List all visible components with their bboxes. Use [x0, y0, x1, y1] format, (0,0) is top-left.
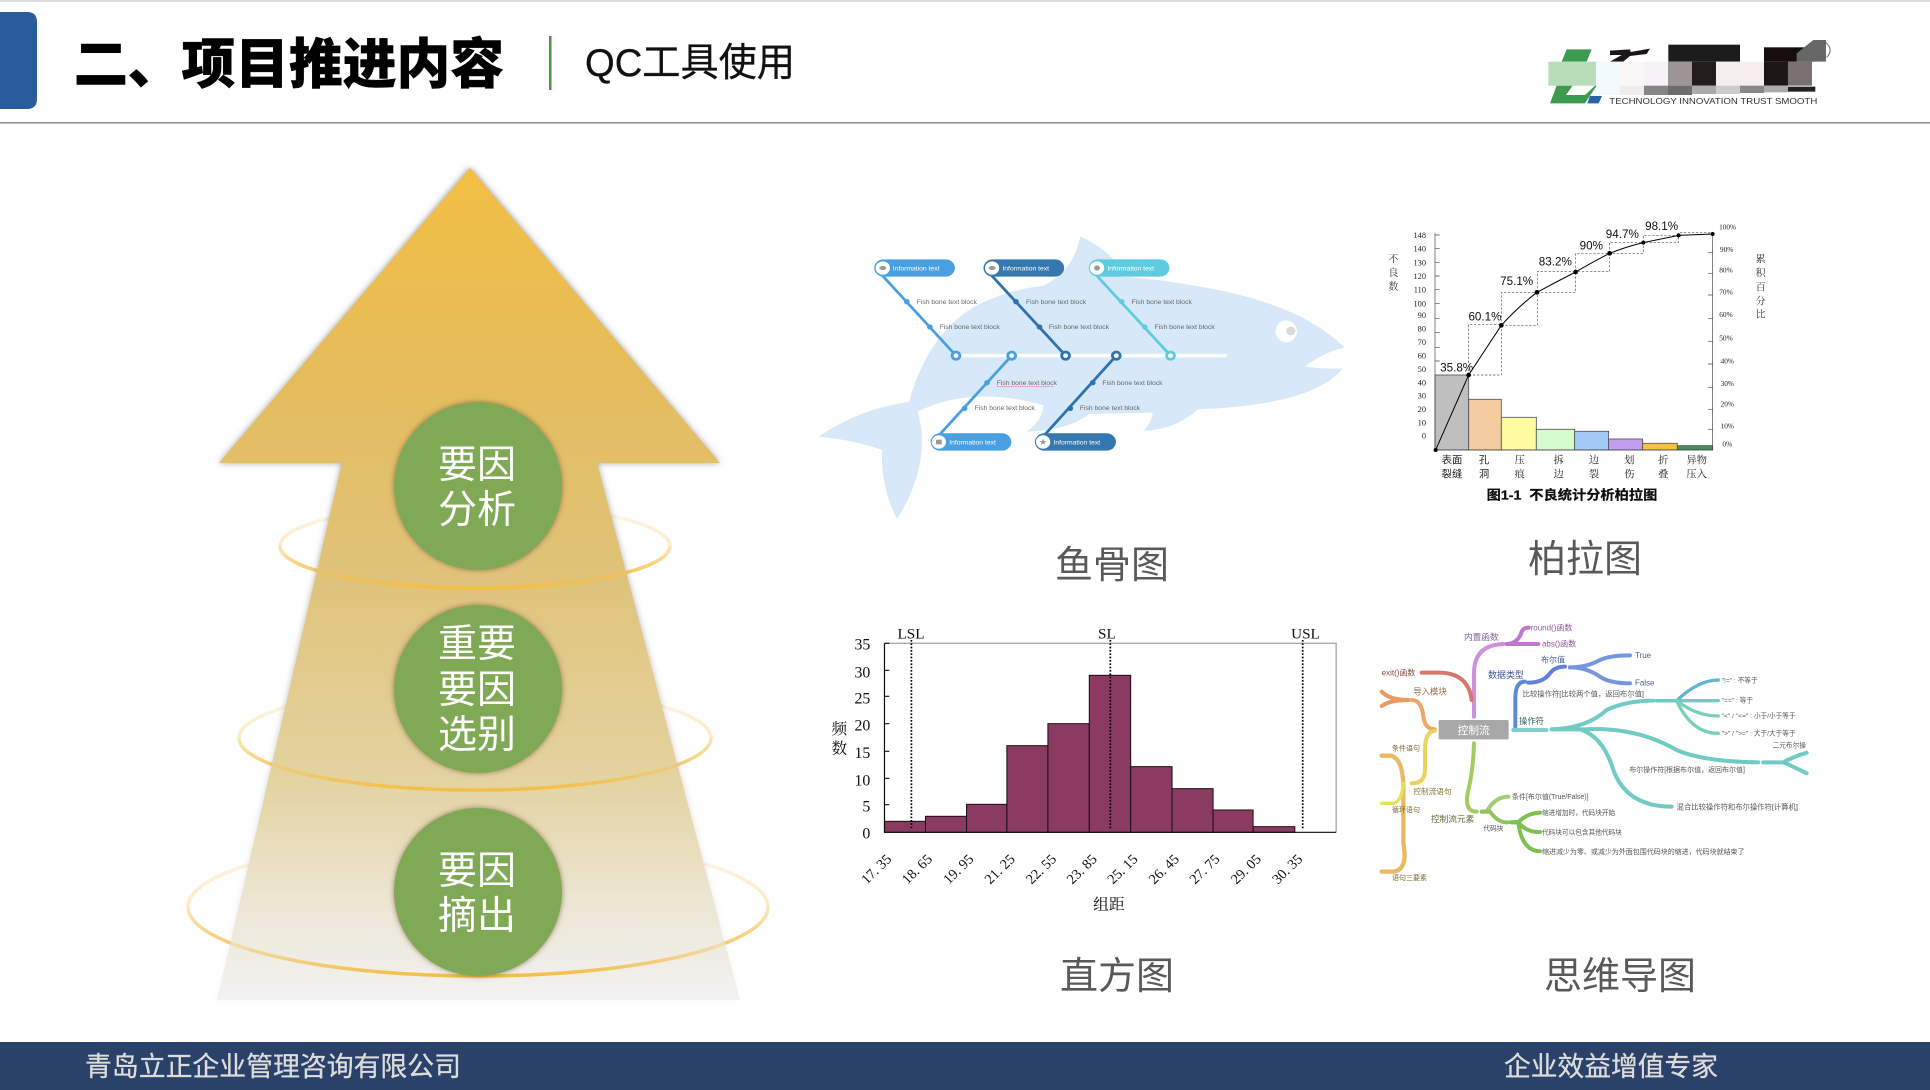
step circle: 要因摘出: 要因: [438, 850, 516, 893]
spec limit lines: [911, 640, 1303, 828]
category labels: 压入: [1686, 467, 1708, 480]
right axis labels: 70%: [1719, 287, 1733, 296]
fish silhouette: [819, 237, 1344, 519]
cumulative line: [1434, 232, 1715, 452]
node labels: 条件语句: [1392, 744, 1420, 753]
node labels: 比较操作符[比较两个值，返回布尔值]: [1523, 690, 1644, 699]
spec limit labels: [898, 627, 1320, 642]
caption: mind map: 思维导图: [1544, 956, 1696, 998]
percentage labels: 98.1%: [1645, 220, 1678, 233]
category labels: 压: [1514, 454, 1525, 466]
bone 5: Information text: [1053, 439, 1100, 446]
node labels: [1382, 623, 1806, 882]
y axis numbers: 5: [862, 799, 871, 815]
y axis numbers: 30: [855, 665, 871, 681]
bone 5: [1035, 352, 1163, 451]
fish eye: [1276, 320, 1297, 342]
left axis labels: 148: [1413, 231, 1426, 240]
right axis title: 百: [1756, 282, 1766, 294]
right axis title: 分: [1756, 295, 1766, 308]
x axis labels: 19. 95: [940, 852, 977, 887]
central node: [1439, 720, 1509, 739]
bone 3: [1089, 259, 1215, 359]
pareto bars: [1435, 375, 1713, 450]
mind map: [1382, 623, 1807, 882]
bone 4: Fish bone text block: [997, 380, 1058, 387]
histogram: [831, 627, 1336, 913]
y axis numbers: 15: [855, 745, 871, 762]
right axis labels: 90%: [1720, 245, 1733, 254]
left axis labels: 30: [1418, 392, 1426, 401]
histogram bars: [884, 675, 1295, 832]
bone 3: Information text: [1107, 266, 1154, 272]
category labels: 边: [1589, 453, 1599, 466]
step circle: 重要要因选别: 要因: [438, 669, 516, 712]
x axis labels: 29. 05: [1228, 852, 1265, 887]
bone 4: Fish bone text block: [975, 405, 1036, 412]
node labels: 控制流元素: [1431, 813, 1475, 824]
bone 5: Fish bone text block: [1080, 405, 1141, 412]
central node: 控制流: [1458, 724, 1490, 737]
category labels: [1442, 453, 1708, 480]
y axis numbers: 0: [862, 826, 871, 843]
left axis labels: 80: [1418, 324, 1426, 333]
bone 4: Information text: [949, 439, 996, 446]
right axis labels: 50%: [1719, 334, 1733, 343]
left axis labels: 110: [1414, 285, 1426, 294]
node labels: 缩进减少为零、或减少为外面包围代码块的缩进，代码块就结束了: [1542, 847, 1745, 856]
right axis labels: 80%: [1719, 266, 1733, 275]
x axis labels: 30. 35: [1269, 852, 1306, 887]
spec limit labels: USL: [1291, 627, 1320, 642]
node labels: 内置函数: [1464, 631, 1499, 642]
spec limit labels: SL: [1098, 627, 1116, 642]
y axis title: [831, 720, 848, 757]
node labels: 数据类型: [1488, 669, 1524, 680]
bone 1: [874, 259, 1001, 359]
percentage labels: 35.8%: [1440, 362, 1473, 375]
node labels: 缩进增加时，代码块开始: [1542, 808, 1616, 817]
category labels: 裂缝: [1442, 467, 1462, 480]
category labels: 异物: [1686, 453, 1707, 466]
category labels: 边: [1553, 467, 1564, 480]
company logo: TECHNOLOGY INNOVATION TRUST SMOOTH: [1609, 96, 1817, 106]
node labels: 控制流语句: [1413, 786, 1452, 796]
left axis labels: 0: [1422, 432, 1426, 441]
bone 2: [983, 259, 1110, 359]
percentage labels: 75.1%: [1500, 275, 1533, 288]
node labels: True: [1635, 651, 1652, 660]
step circle: 要因分析: 要因: [438, 444, 516, 487]
bone 3: Fish bone text block: [1155, 324, 1215, 331]
bone 2: Fish bone text block: [1049, 324, 1110, 331]
x axis labels: 26. 45: [1146, 852, 1183, 887]
x axis labels: 27. 75: [1186, 852, 1224, 887]
title: 二、项目推进内容: [74, 35, 504, 95]
divider line: [549, 36, 552, 90]
node labels: 布尔操作符[根据布尔值，返回布尔值]: [1629, 765, 1745, 774]
right axis labels: 30%: [1721, 379, 1734, 388]
step circle: 要因分析: [394, 402, 562, 570]
percentage labels: 90%: [1580, 239, 1603, 252]
step circle: 重要要因选别: 重要: [438, 623, 516, 666]
node labels: 循环语句: [1392, 805, 1420, 814]
green branch: [1467, 743, 1540, 851]
teal branch: [1513, 680, 1807, 807]
axes: [884, 643, 1336, 832]
step circle: 重要要因选别: [394, 605, 562, 773]
pareto chart: [1388, 220, 1767, 502]
bone 2: Fish bone text block: [1026, 299, 1087, 306]
header blue tab: [0, 12, 37, 109]
right axis labels: 60%: [1719, 310, 1733, 319]
node labels: 导入模块: [1413, 687, 1447, 697]
left axis labels: 100: [1413, 299, 1426, 308]
node labels: 布尔值: [1541, 655, 1565, 665]
node labels: 代码块可以包含其他代码块: [1542, 827, 1622, 836]
pareto axes: [1435, 233, 1713, 450]
right axis labels: 0%: [1722, 440, 1732, 449]
blue branch: [1515, 655, 1630, 727]
panel: rising arrow with three steps: [188, 168, 768, 1000]
left axis title: 数: [1388, 280, 1398, 293]
header band: [0, 0, 1930, 124]
step circle: 要因摘出: 摘出: [438, 895, 516, 938]
category labels: 洞: [1479, 468, 1489, 480]
bone 4: [931, 352, 1058, 451]
category labels: 划: [1624, 453, 1634, 466]
rings front halves: [188, 546, 768, 976]
right axis title: 比: [1756, 307, 1766, 320]
bone 5: Fish bone text block: [1102, 380, 1163, 387]
purple branch: [1474, 628, 1538, 717]
yellow branch: [1382, 731, 1435, 872]
node labels: 二元布尔操: [1773, 740, 1806, 749]
orange branch: [1382, 692, 1435, 729]
bone 3: Fish bone text block: [1132, 299, 1193, 306]
x axis labels: 17. 35: [858, 852, 895, 887]
step circle: 要因分析: 分析: [438, 489, 516, 532]
y axis title: 频: [831, 720, 848, 738]
category labels: 裂: [1589, 467, 1599, 480]
node labels: 操作符: [1519, 716, 1544, 726]
left axis title: [1388, 254, 1398, 293]
category labels: 伤: [1624, 467, 1634, 480]
spec limit labels: LSL: [898, 627, 925, 642]
fishbone diagram: [819, 237, 1344, 519]
node labels: "<" / "<=" : 小于/小于等于: [1722, 711, 1796, 720]
bone 2: Information text: [1002, 266, 1049, 272]
red branch: [1422, 673, 1472, 700]
bone 5: ★: [1039, 438, 1047, 447]
node labels: 混合比较操作符和布尔操作符[计算机]: [1677, 802, 1798, 811]
node labels: exit()函数: [1382, 668, 1415, 678]
right axis labels: 40%: [1721, 357, 1734, 366]
right axis title: 积: [1756, 267, 1767, 280]
category labels: 孔: [1479, 454, 1490, 466]
bone 1: Fish bone text block: [940, 324, 1001, 331]
left axis labels: 90: [1418, 311, 1426, 320]
node labels: "==" : 等于: [1722, 695, 1753, 704]
category labels: 拆: [1553, 453, 1564, 466]
percentage labels: 83.2%: [1539, 256, 1572, 269]
category labels: 表面: [1442, 453, 1462, 466]
x axis labels: 18. 65: [899, 852, 936, 887]
caption: pareto: 柏拉图: [1528, 539, 1642, 581]
x axis labels: 25. 15: [1104, 852, 1141, 887]
subtitle: QC工具使用: [585, 42, 795, 85]
node labels: 语句三要素: [1392, 873, 1427, 882]
pareto dashed steps: [1469, 233, 1713, 375]
node labels: "!=" : 不等于: [1722, 675, 1758, 684]
left axis labels: [1413, 231, 1426, 441]
company logo: [1548, 40, 1830, 106]
bone 1: Information text: [893, 266, 940, 272]
left axis labels: 70: [1418, 338, 1426, 347]
arrow shape: [217, 168, 740, 1000]
y axis numbers: 25: [855, 691, 871, 707]
category labels: 痕: [1514, 468, 1525, 480]
plot frame: [884, 643, 1336, 832]
right axis labels: 10%: [1721, 422, 1734, 431]
left axis labels: 120: [1413, 272, 1426, 281]
percentage labels: 94.7%: [1606, 228, 1639, 241]
right axis title: [1756, 254, 1767, 320]
node labels: 代码块: [1483, 824, 1504, 833]
node labels: ">" / ">=" : 大于/大于等于: [1722, 729, 1796, 738]
left axis title: 不: [1388, 254, 1398, 266]
percentage labels: [1440, 220, 1678, 375]
left axis labels: 130: [1413, 258, 1426, 267]
left axis labels: 60: [1418, 352, 1426, 361]
node labels: round()函数: [1531, 623, 1572, 633]
y axis numbers: [855, 637, 871, 843]
node labels: 条件[布尔值(True/False)]: [1512, 792, 1589, 801]
caption: histogram: 直方图: [1060, 956, 1174, 998]
left axis labels: 20: [1418, 405, 1426, 414]
x axis title: 组距: [1093, 896, 1125, 913]
left axis labels: 10: [1418, 419, 1426, 428]
right axis labels: 20%: [1721, 399, 1734, 408]
chart caption: 图1-1 不良统计分析柏拉图: [1487, 486, 1657, 502]
caption: fishbone: 鱼骨图: [1055, 545, 1169, 587]
node labels: False: [1635, 679, 1655, 688]
left axis labels: 40: [1418, 378, 1426, 387]
category labels: 折: [1658, 453, 1668, 466]
right axis labels: [1719, 222, 1736, 449]
step circle: 要因摘出: [394, 808, 562, 976]
y axis numbers: 35: [855, 637, 871, 653]
category labels: 叠: [1658, 467, 1668, 480]
x axis labels: 21. 25: [982, 852, 1019, 887]
spine: [957, 354, 1227, 357]
left axis labels: 140: [1413, 244, 1426, 253]
right axis labels: 100%: [1719, 222, 1736, 231]
y axis title: 数: [831, 740, 848, 757]
y axis numbers: 20: [855, 718, 871, 735]
footer slogan: 企业效益增值专家: [1504, 1052, 1718, 1082]
percentage labels: 60.1%: [1468, 311, 1502, 324]
node labels: abs()函数: [1542, 638, 1576, 648]
bone 1: Fish bone text block: [917, 299, 978, 306]
right axis title: 累: [1756, 254, 1766, 266]
arrow shadow: [217, 168, 740, 1000]
left axis labels: 50: [1418, 365, 1426, 374]
footer company name: 青岛立正企业管理咨询有限公司: [85, 1052, 461, 1082]
y axis numbers: 10: [855, 773, 871, 789]
x axis labels: 23. 85: [1064, 852, 1101, 887]
step circle: 重要要因选别: 选别: [438, 714, 516, 757]
left axis title: 良: [1388, 266, 1398, 279]
x axis labels: 22. 55: [1023, 852, 1060, 887]
footer bar: [0, 1042, 1930, 1090]
x axis labels: [858, 852, 1306, 887]
rings behind arrow: [188, 504, 768, 976]
